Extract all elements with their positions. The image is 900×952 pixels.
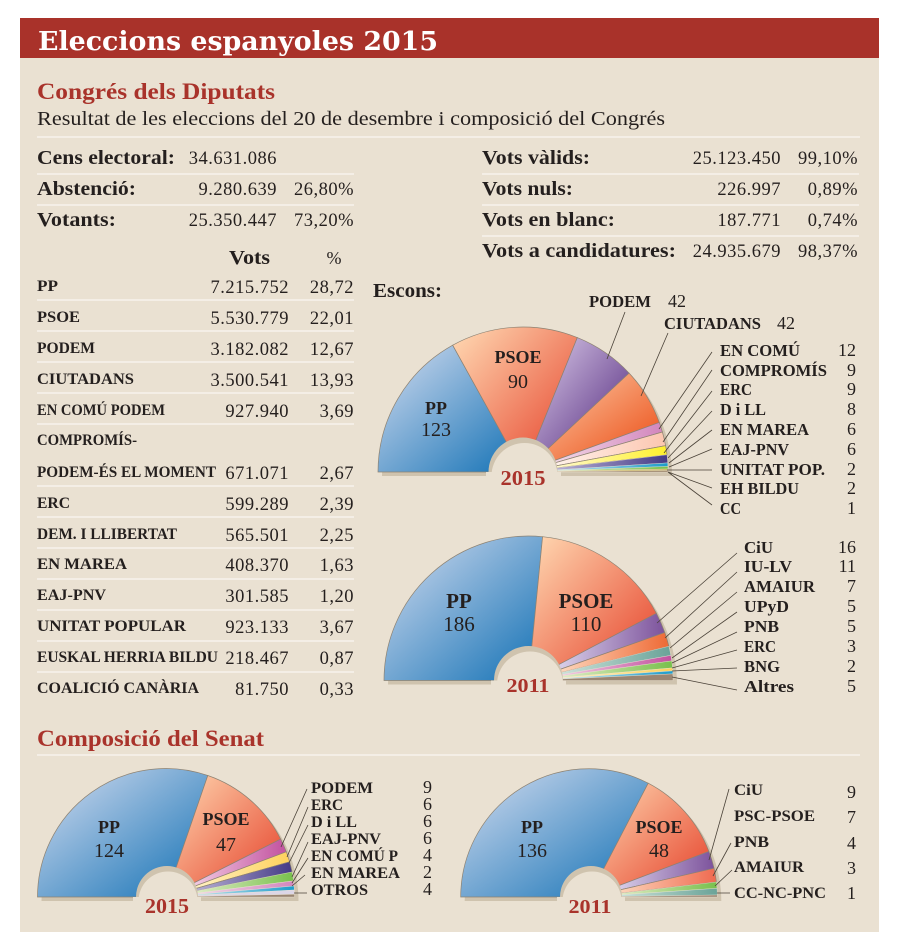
legend: Senate 2011 seats: CiU	[734, 782, 763, 799]
table: votes by party: 1,63	[320, 556, 354, 576]
table: votes by party: 301.585	[225, 587, 289, 607]
legend: Congress 2015 seats: 1	[847, 498, 856, 518]
table: valid votes summary: 187.771	[717, 211, 781, 231]
label: PSOE 48	[635, 817, 683, 862]
table: census summary: 34.631.086	[189, 149, 277, 169]
label: PP 186: 186	[443, 612, 475, 636]
table: votes by party: 2,67	[320, 464, 354, 484]
legend: Congress 2015 seats: PODEM	[589, 292, 651, 311]
label: PP 186	[443, 589, 475, 636]
wedge: PSOE	[453, 327, 577, 472]
legend: Senate 2015 seats: ERC	[311, 797, 343, 814]
table: votes by party: 81.750	[235, 680, 289, 700]
legend: Congress 2015 seats: EN MAREA	[720, 420, 809, 439]
label: PSOE 110	[559, 589, 613, 636]
legend: Congress 2015 seats: 2	[847, 459, 856, 479]
label: PSOE 48: 48	[649, 840, 669, 862]
table: valid votes summary	[482, 147, 859, 262]
legend: Congress 2015 seats: 9	[847, 360, 856, 380]
legend: Congress 2015 seats: D i LL	[720, 400, 766, 419]
table: valid votes summary: 0,89%	[808, 180, 858, 200]
legend: Congress 2011 seats: IU-LV	[744, 557, 792, 576]
legend: Congress 2011 seats: 5	[847, 596, 856, 616]
table: votes by party: 7.215.752	[210, 278, 289, 298]
wedges: smaller parties	[528, 613, 673, 680]
table: votes by party: EN MAREA	[37, 556, 127, 573]
wedge: PP	[461, 769, 648, 897]
legend: Congress 2011 seats: Altres	[744, 677, 795, 696]
label: PP 123	[421, 398, 451, 441]
legend: Congress 2011 seats: PNB	[744, 617, 779, 636]
table: votes by party: PODEM-ÉS EL MOMENT	[37, 462, 216, 481]
table: votes by party: 923.133	[225, 618, 289, 638]
legend: Senate 2011 seats: AMAIUR	[734, 859, 804, 876]
label: PSOE 110: 110	[571, 612, 601, 636]
table: votes by party	[37, 247, 354, 700]
table: votes by party: 0,87	[320, 649, 354, 669]
legend: Congress 2011 seats: 16	[838, 537, 856, 557]
table: valid votes summary: 24.935.679	[693, 242, 781, 262]
label: PP 123: 123	[421, 419, 451, 441]
table: votes by party: 22,01	[310, 309, 354, 329]
table: votes by party: 3.182.082	[210, 340, 289, 360]
table: votes by party: PSOE	[37, 309, 80, 326]
legend: Congress 2015 seats: CC	[720, 499, 741, 518]
table: census summary: Votants:	[37, 209, 116, 231]
legend: Congress 2011 seats: 2	[847, 656, 856, 676]
wedges: smaller parties	[166, 839, 294, 897]
legend: Congress 2011 seats: ERC	[744, 637, 776, 656]
table: votes by party: 2,25	[320, 526, 354, 546]
legend: Senate 2011 seats: CC-NC-PNC	[734, 885, 826, 902]
legend: Senate 2015 seats: 2	[423, 862, 432, 882]
legend: Congress 2011 seats: AMAIUR	[744, 577, 816, 596]
label: PSOE 90	[494, 347, 542, 393]
legend: Senate 2011 seats: 9	[847, 782, 856, 802]
legend: Senate 2011 seats: 4	[847, 833, 856, 853]
table: valid votes summary: 98,37%	[798, 242, 858, 262]
title banner	[20, 18, 879, 58]
label: PP 124: 124	[94, 840, 124, 862]
label: PP 186: PP	[446, 589, 472, 613]
leader lines: Congress 2011	[657, 553, 737, 690]
table: valid votes summary: Vots en blanc:	[482, 209, 615, 231]
legend: Congress 2011 seats	[744, 537, 856, 696]
chart: Senate seats 2011	[461, 769, 721, 930]
legend: Congress 2011 seats: UPyD	[744, 597, 789, 616]
table: votes by party: 565.501	[225, 526, 289, 546]
legend: Congress 2015 seats: ERC	[720, 380, 752, 399]
legend: Congress 2015 seats	[589, 291, 856, 518]
table: valid votes summary: 226.997	[717, 180, 781, 200]
chart: Congress seats 2011	[384, 536, 677, 718]
table: census summary: 73,20%	[294, 211, 354, 231]
chart: Congress seats 2015	[378, 327, 672, 509]
label: PP 124	[94, 817, 124, 862]
legend: Senate 2015 seats	[311, 777, 432, 899]
label: PSOE 47: 47	[216, 834, 236, 856]
label: year 2011: 2011	[506, 675, 550, 697]
legend: Senate 2015 seats: D i LL	[311, 814, 357, 831]
legend: Congress 2015 seats: EAJ-PNV	[720, 440, 789, 459]
table: valid votes summary: Vots vàlids:	[482, 147, 590, 169]
table: votes by party: 3,69	[320, 402, 354, 422]
legend: Congress 2015 seats: 6	[847, 439, 856, 459]
legend: Congress 2011 seats: BNG	[744, 657, 780, 676]
legend: Congress 2015 seats: 6	[847, 419, 856, 439]
table: votes by party: 408.370	[225, 556, 289, 576]
legend: Senate 2015 seats: EAJ-PNV	[311, 831, 381, 848]
legend: Senate 2011 seats: PSC-PSOE	[734, 808, 815, 825]
legend: Senate 2015 seats: 9	[423, 777, 432, 797]
table: votes by party: COALICIÓ CANÀRIA	[37, 678, 199, 697]
wedge: PP	[38, 769, 208, 897]
legend: Congress 2011 seats: 11	[839, 556, 856, 576]
legend: Senate 2011 seats: PNB	[734, 834, 769, 851]
label: PSOE 48: PSOE	[635, 817, 683, 837]
legend: Senate 2011 seats	[734, 782, 856, 903]
label: PP 123: PP	[425, 398, 447, 418]
label: PP 136: 136	[517, 840, 547, 862]
table: votes by party: PODEM	[37, 340, 95, 357]
legend: Senate 2015 seats: 4	[423, 845, 432, 865]
legend: Senate 2015 seats: OTROS	[311, 882, 368, 899]
table: votes by party: 671.071	[225, 464, 289, 484]
legend: Senate 2015 seats: 4	[423, 879, 432, 899]
table: votes by party: EN COMÚ PODEM	[37, 400, 165, 419]
legend: Congress 2015 seats: EH BILDU	[720, 479, 799, 498]
heading: Escons: Escons:	[373, 280, 442, 302]
table: votes by party: 2,39	[320, 495, 354, 515]
table: votes by party: 12,67	[310, 340, 354, 360]
table: votes by party: 5.530.779	[210, 309, 289, 329]
table: census summary: Abstenció:	[37, 178, 136, 200]
legend: Congress 2015 seats: 8	[847, 399, 856, 419]
label: PSOE 90: PSOE	[494, 347, 542, 367]
table: votes by party: COMPROMÍS-	[37, 430, 137, 449]
table: votes by party: 927.940	[225, 402, 289, 422]
table: votes by party: 218.467	[225, 649, 289, 669]
table: valid votes summary: Vots nuls:	[482, 178, 573, 200]
legend: Congress 2011 seats: 5	[847, 616, 856, 636]
table: census summary: 26,80%	[294, 180, 354, 200]
table: votes by party: ERC	[37, 495, 70, 512]
table: valid votes summary: 0,74%	[808, 211, 858, 231]
label: year 2015: 2015	[500, 466, 546, 490]
legend: Congress 2015 seats: CIUTADANS	[664, 314, 761, 333]
table: votes by party: 3.500.541	[210, 371, 289, 391]
wedges: smaller parties	[523, 422, 668, 472]
wedge: PSOE	[589, 783, 709, 897]
legend: Congress 2015 seats: EN COMÚ	[720, 341, 800, 360]
label: PSOE 110: PSOE	[559, 589, 613, 613]
label: year 2015: 2015	[145, 894, 189, 918]
table: votes by party: 1,20	[320, 587, 354, 607]
table: votes by party: PP	[37, 278, 58, 295]
leader lines: Senate 2015	[281, 789, 308, 893]
table: votes by party: DEM. I LLIBERTAT	[37, 526, 177, 543]
heading: Congrés dels Diputats: Congrés dels Diputats	[37, 79, 275, 104]
legend: Congress 2015 seats: UNITAT POP.	[720, 460, 825, 479]
legend: Congress 2015 seats: 42	[668, 291, 686, 311]
subtitle: Resultat de les eleccions del 20 de desembre i composició del Congrés	[37, 108, 665, 130]
legend: Congress 2015 seats: 42	[777, 313, 795, 333]
table: valid votes summary: 99,10%	[798, 149, 858, 169]
wedge: PP	[384, 536, 543, 680]
legend: Senate 2011 seats: 1	[847, 883, 856, 903]
legend: Congress 2015 seats: 2	[847, 478, 856, 498]
label: PSOE 90: 90	[508, 371, 528, 393]
wedge: PP	[378, 345, 523, 472]
table: census summary	[37, 147, 354, 231]
table: votes by party: UNITAT POPULAR	[37, 618, 186, 635]
heading: Composició del Senat: Composició del Senat	[37, 726, 264, 751]
legend: Senate 2015 seats: PODEM	[311, 780, 373, 797]
legend: Congress 2011 seats: 7	[847, 576, 856, 596]
leader lines: Congress 2015	[607, 312, 712, 505]
chart: Senate seats 2015	[38, 769, 298, 930]
label: PSOE 47: PSOE	[202, 809, 250, 829]
table: valid votes summary: Vots a candidatures:	[482, 240, 676, 262]
table: votes by party: 28,72	[310, 278, 354, 298]
table: votes by party: 3,67	[320, 618, 354, 638]
legend: Senate 2011 seats: 7	[847, 807, 856, 827]
table: votes by party: 599.289	[225, 495, 289, 515]
label: year 2011: 2011	[568, 896, 612, 918]
wedge: PSOE	[528, 537, 656, 680]
leader lines: Senate 2011	[709, 789, 732, 893]
title banner: Eleccions espanyoles 2015	[38, 27, 438, 57]
table: votes by party: Vots	[229, 247, 270, 269]
table: votes by party: %	[326, 248, 342, 268]
table: votes by party: EAJ-PNV	[37, 587, 106, 604]
table: votes by party: 0,33	[320, 680, 354, 700]
label: PP 136	[517, 817, 547, 862]
legend: Congress 2015 seats: COMPROMÍS	[720, 361, 827, 380]
table: census summary: 25.350.447	[189, 211, 277, 231]
legend: Congress 2011 seats: 3	[847, 636, 856, 656]
legend: Senate 2015 seats: EN MAREA	[311, 865, 400, 882]
label: PP 136: PP	[521, 817, 543, 837]
table: census summary: 9.280.639	[198, 180, 277, 200]
legend: Senate 2015 seats: 6	[423, 794, 432, 814]
table: valid votes summary: 25.123.450	[693, 149, 781, 169]
table: census summary: Cens electoral:	[37, 147, 175, 169]
table: votes by party: 13,93	[310, 371, 354, 391]
legend: Congress 2011 seats: CiU	[744, 538, 773, 557]
table: votes by party: EUSKAL HERRIA BILDU	[37, 649, 218, 666]
legend: Senate 2015 seats: 6	[423, 828, 432, 848]
legend: Senate 2015 seats: 6	[423, 811, 432, 831]
label: PP 124: PP	[98, 817, 120, 837]
legend: Congress 2011 seats: 5	[847, 676, 856, 696]
wedges: smaller parties	[589, 851, 717, 897]
wedge: PODEM	[523, 338, 629, 472]
wedge: PSOE	[166, 776, 281, 897]
legend: Senate 2015 seats: EN COMÚ P	[311, 846, 398, 865]
legend: Congress 2015 seats: 9	[847, 379, 856, 399]
wedge: CIUTADANS	[523, 373, 659, 472]
legend: Congress 2015 seats: 12	[838, 340, 856, 360]
label: PSOE 47	[202, 809, 250, 856]
table: votes by party: CIUTADANS	[37, 371, 134, 388]
legend: Senate 2011 seats: 3	[847, 858, 856, 878]
